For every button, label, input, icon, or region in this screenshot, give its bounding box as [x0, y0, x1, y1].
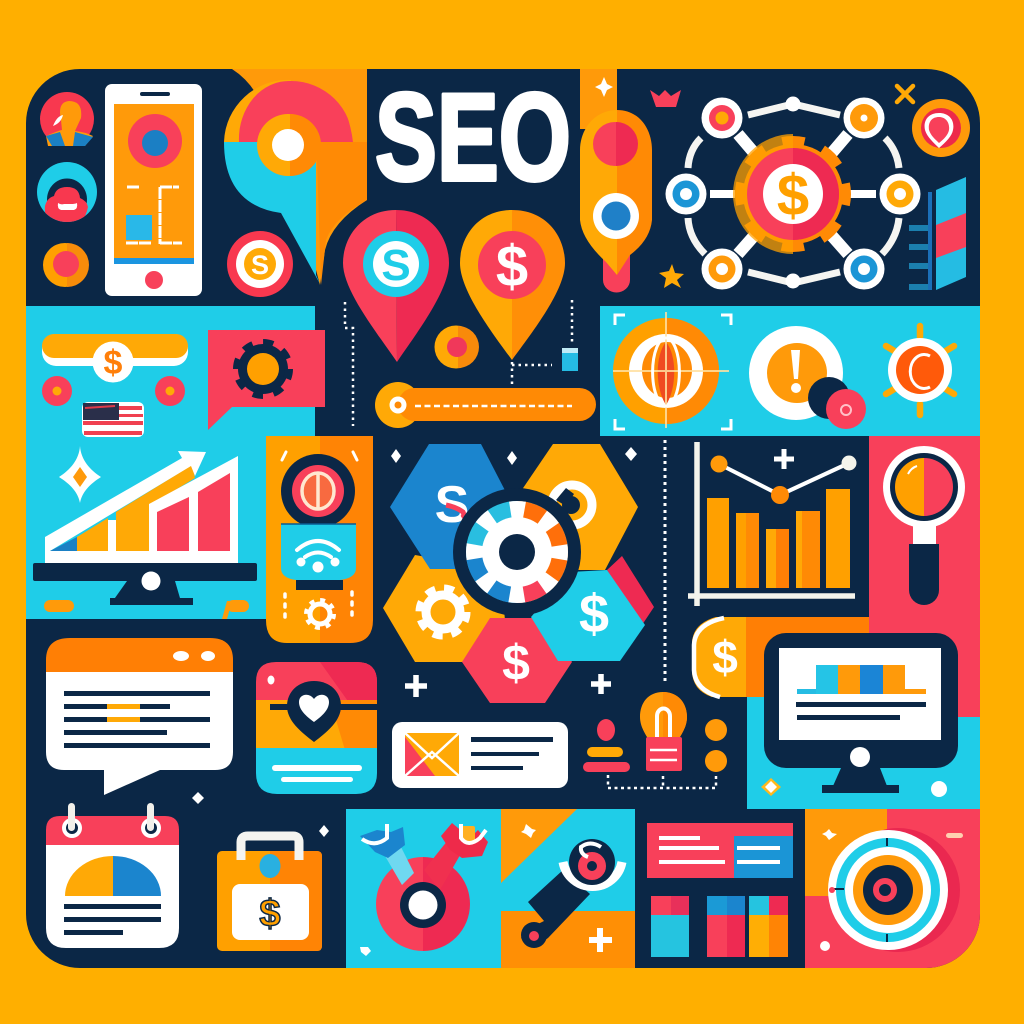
avatar icons — [37, 92, 97, 287]
dollar tag — [692, 617, 869, 727]
orange vertical tag — [580, 69, 652, 292]
dollar banner — [42, 334, 188, 382]
sun icon — [886, 326, 954, 415]
dotted connectors — [345, 300, 572, 426]
hex: cyan — [531, 570, 645, 661]
speech bubble with gear — [208, 330, 325, 430]
coin icon: S — [251, 250, 269, 280]
network gear: $ — [777, 163, 809, 228]
globe icon — [613, 312, 731, 429]
hex: red bottom — [462, 618, 572, 703]
gear network — [666, 96, 920, 290]
sparkle diamonds lower — [192, 792, 329, 837]
hex dollar right: $ — [579, 584, 609, 644]
cyan panel: spanner — [501, 809, 635, 968]
hex: orange top — [517, 444, 638, 570]
monitor — [764, 633, 958, 793]
small pin badge — [912, 99, 970, 157]
coin icon — [227, 231, 293, 297]
dotted divider — [664, 440, 666, 682]
hex dollar bottom: $ — [502, 635, 530, 691]
flag — [82, 402, 144, 437]
plus marks — [405, 674, 611, 697]
calendar — [46, 803, 179, 948]
network gear — [733, 134, 843, 254]
hex: blue — [390, 444, 510, 569]
pin: orange: $ — [496, 234, 528, 299]
hex: orange left — [383, 555, 505, 662]
ring glyph — [552, 485, 592, 525]
cross mark — [897, 86, 913, 102]
top location marker — [224, 69, 367, 285]
pin: red: S — [381, 241, 411, 290]
pin: orange — [460, 210, 565, 360]
growth chart on monitor — [33, 451, 257, 605]
money bag — [217, 836, 322, 951]
text card — [647, 823, 793, 878]
central gear — [453, 488, 581, 616]
star mark — [659, 264, 684, 288]
browser speech bubble — [46, 638, 233, 795]
cyan panel: left — [26, 306, 315, 619]
target panel — [805, 809, 980, 968]
small orange dot marker — [434, 326, 479, 368]
dollar banner: $ — [104, 344, 123, 382]
hex gear left — [419, 588, 467, 636]
orange device card — [266, 436, 373, 643]
magnifier — [883, 446, 965, 605]
slider bar — [375, 382, 596, 428]
envelope card — [392, 722, 568, 788]
pin: red — [343, 210, 449, 362]
small orange stands — [44, 600, 249, 619]
bar chart — [688, 442, 856, 606]
sparkle diamonds — [391, 447, 637, 465]
alert icon — [749, 326, 866, 429]
color blocks — [651, 896, 788, 957]
hex: red sliver — [607, 556, 654, 625]
small cyan block — [562, 348, 578, 371]
network nodes — [666, 98, 920, 290]
money bag: $ — [259, 893, 281, 935]
right bar graphic — [909, 177, 966, 290]
sparkle — [59, 446, 101, 503]
red side panel — [869, 436, 980, 717]
lightbulb cluster — [583, 692, 727, 788]
cyan panel: monitor — [747, 717, 980, 809]
hexagon cluster — [383, 444, 654, 703]
crown icon — [650, 90, 681, 107]
monitor accents — [761, 778, 947, 797]
title: SEO — [375, 69, 571, 207]
red dots — [42, 376, 185, 406]
social card — [256, 662, 377, 794]
cyan panel: wrench — [346, 809, 501, 968]
cyan panel: top right — [600, 306, 980, 436]
dollar tag: $ — [712, 631, 738, 683]
letter S: S — [435, 476, 469, 534]
phone icon — [105, 84, 202, 296]
